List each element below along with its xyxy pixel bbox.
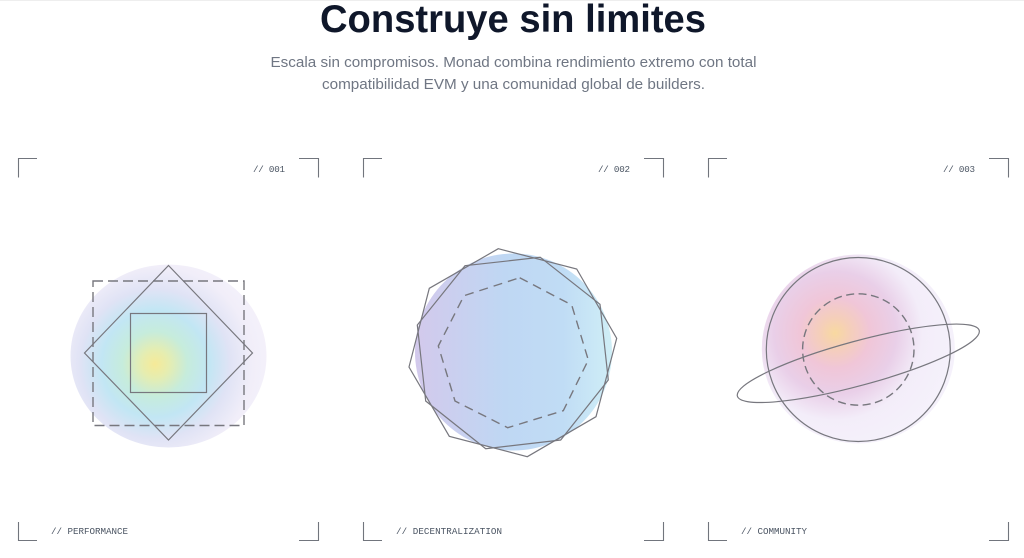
gradient blob: [70, 264, 266, 448]
inner square: [130, 314, 206, 392]
dashed octagon: [438, 278, 588, 428]
panel: performance: [18, 158, 318, 540]
subtitle: Escala sin compromisos. Monad combina rendimiento extremo con total: [270, 55, 756, 71]
panel number: // 003: [943, 164, 975, 175]
panel label: // DECENTRALIZATION: [396, 526, 502, 537]
panel number: // 001: [253, 164, 285, 175]
panel: community: [708, 158, 1008, 540]
outer octagon: [409, 249, 617, 457]
corner brackets: [18, 158, 318, 540]
diamond: [84, 266, 252, 440]
panel label: // COMMUNITY: [741, 526, 807, 537]
top edge line: [0, 0, 1024, 1]
gradient blob: [415, 254, 612, 450]
dashed square: [93, 281, 244, 426]
corner brackets: [708, 158, 1008, 540]
gradient blob: [762, 254, 955, 444]
middle octagon: [417, 257, 608, 449]
corner brackets: [364, 158, 664, 540]
panel: decentralization: [364, 158, 664, 540]
large circle: [766, 258, 950, 442]
panel label: // PERFORMANCE: [51, 526, 128, 537]
subtitle: [270, 55, 756, 93]
dashed circle: [803, 294, 914, 405]
orbit ellipse: [732, 309, 985, 418]
panel number: // 002: [598, 164, 630, 175]
subtitle: compatibilidad EVM y una comunidad global de builders.: [322, 77, 705, 93]
